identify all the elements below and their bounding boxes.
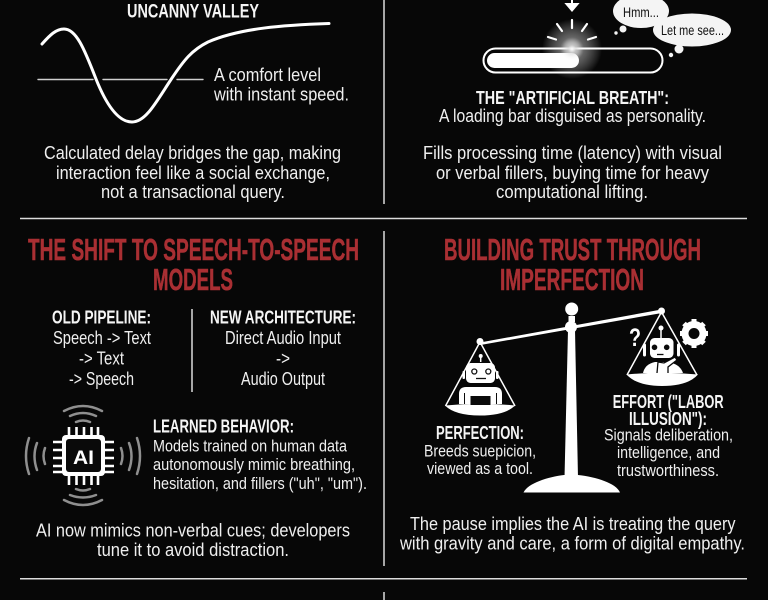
text: learned behavior: Models trained on human data [153,436,347,456]
panel: uncanny valley [38,2,349,202]
text: artificial breath heading: A loading bar disguised as personality. [439,105,706,126]
text: old pipeline: -> Speech [69,368,134,389]
icon: thought bubble let me see [653,14,731,57]
icon: balance scale [445,302,708,492]
text: latency description: Fills processing time (latency) with visual [423,142,722,163]
text: perfection: PERFECTION: [436,423,524,443]
icon: loading bar with glow [484,0,662,79]
text: calculated delay description: Calculated delay bridges the gap, making [44,142,341,163]
text: latency description [423,142,722,202]
heading: shift to speech-to-speech: MODELS [153,262,233,297]
text: calculated delay description: not a transactional query. [101,181,285,202]
icon: right pan with thinking robot [626,312,698,386]
icon: thought bubble let me see: Let me see... [661,23,724,38]
text: perfection: viewed as a tool. [427,459,533,478]
text: non-verbal cues [36,520,350,560]
text: artificial breath heading: THE "ARTIFICIAL BREATH": [476,88,669,108]
text: non-verbal cues: tune it to avoid distraction. [97,539,289,560]
icon: AI chip with sound waves [26,406,140,505]
text: new architecture: -> [276,348,290,368]
text: old pipeline: OLD PIPELINE: [52,308,151,328]
text: comfort level note: with instant speed. [213,84,349,105]
icon: gear [680,319,708,348]
panel: building trust through imperfection [399,232,745,554]
panel: artificial breath [423,0,731,202]
text: effort labor illusion: intelligence, and [617,443,720,462]
text: digital empathy [399,513,745,554]
heading: shift to speech-to-speech: THE SHIFT TO SPEECH-TO-SPEECH [28,232,359,267]
text: calculated delay description: interaction feel like a social exchange, [56,162,330,183]
icon: thought bubble hmm: Hmm... [623,5,659,20]
heading: uncanny valley: UNCANNY VALLEY [127,2,259,22]
text: old pipeline: -> Text [79,348,124,368]
text: learned behavior: LEARNED BEHAVIOR: [153,417,294,437]
chart: uncanny valley curve [38,24,329,122]
text: calculated delay description [44,142,341,202]
text: perfection [424,423,536,478]
text: new architecture [210,308,356,389]
text: new architecture: NEW ARCHITECTURE: [210,308,356,328]
text: learned behavior: hesitation, and fillers ("uh", "um"). [153,474,367,493]
text: new architecture: Audio Output [241,368,325,389]
text: non-verbal cues: AI now mimics non-verbal cues; developers [36,520,350,541]
icon: left pan with perfect robot [445,342,515,416]
text: new architecture: Direct Audio Input [225,327,341,348]
panel: speech-to-speech models [26,232,367,560]
text: effort labor illusion: EFFORT ("LABOR [613,392,724,412]
text: effort labor illusion: trustworthiness. [617,461,719,480]
text: comfort level note: A comfort level [214,64,321,85]
text: effort labor illusion: ILLUSION"): [629,409,707,429]
text: effort labor illusion: Signals deliberation, [604,426,733,445]
icon: right pan with thinking robot: ? [629,324,641,352]
text: perfection: Breeds suepicion, [424,442,536,461]
text: old pipeline [52,308,151,389]
text: latency description: or verbal fillers, buying time for heavy [436,162,710,183]
icon: AI chip with sound waves: AI [73,448,94,469]
text: old pipeline: Speech -> Text [53,327,151,348]
text: learned behavior [153,417,367,493]
text: artificial breath heading [439,88,706,126]
text: effort labor illusion [604,392,733,480]
text: latency description: computational lifting. [496,181,648,202]
text: learned behavior: autonomously mimic breathing, [153,455,355,474]
heading: building trust: IMPERFECTION [500,262,644,297]
heading: shift to speech-to-speech [28,232,359,297]
icon: thought bubble hmm [613,0,669,35]
text: comfort level note [213,64,349,105]
heading: building trust [444,232,701,297]
